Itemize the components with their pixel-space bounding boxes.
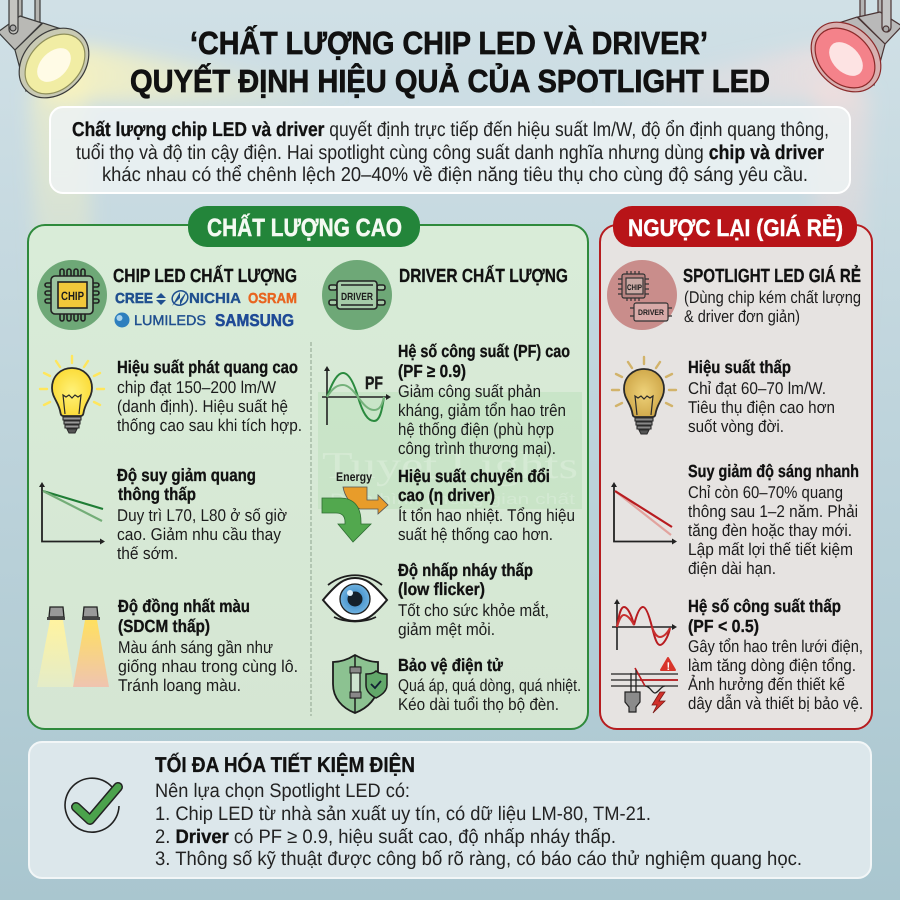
text: hệ số công suất thấp: Gây tổn hao trên lưới điện, xyxy=(688,637,863,656)
icon: driver xyxy=(322,260,392,330)
text: độ đồng nhất màu: Tránh loang màu. xyxy=(118,676,241,695)
text: hệ số công suất thấp: Hệ số công suất thấp xyxy=(688,596,841,616)
icon: low lumen decay chart xyxy=(39,482,105,544)
text: hiệu suất chuyển đổi xyxy=(398,466,575,544)
text: suy giảm độ sáng nhanh: Suy giảm độ sáng nhanh xyxy=(688,461,859,481)
text: hiệu suất phát quang cao: thống cao sau khi tích hợp. xyxy=(117,416,302,435)
text: hệ số công suất cao: hệ thống điện (phù hợp xyxy=(398,420,554,439)
text: độ đồng nhất màu: Màu ánh sáng gần như xyxy=(118,638,273,657)
text: độ nhấp nháy thấp: Tốt cho sức khỏe mắt, xyxy=(398,601,549,620)
icon: uniform colour beams xyxy=(37,607,109,687)
icon: power factor wave: PF xyxy=(365,373,383,393)
icon: driver: DRIVER xyxy=(341,291,373,303)
icon: low power factor wave and grid xyxy=(611,599,678,713)
title xyxy=(130,25,770,99)
text: recommendations xyxy=(155,752,802,870)
heading: chip LED: CHIP LED CHẤT LƯỢNG xyxy=(113,264,297,287)
text: hiệu suất phát quang cao: (danh định). Hiệu suất hệ xyxy=(117,397,288,416)
text: suy giảm độ sáng nhanh: Chỉ còn 60–70% quang xyxy=(688,483,843,502)
text: độ đồng nhất màu: giống nhau trong cùng lô. xyxy=(118,657,298,676)
panel: chất lượng cao xyxy=(28,206,588,729)
text: độ nhấp nháy thấp: giảm mệt mỏi. xyxy=(398,620,495,639)
icon: cheap chip and driver: CHIP xyxy=(627,283,643,292)
text: hiệu suất chuyển đổi: cao (η driver) xyxy=(398,485,495,505)
text: recommendations: 1. Chip LED từ nhà sản xuất uy tín, có dữ liệu LM-80, TM-21. xyxy=(155,803,651,825)
text: hệ số công suất cao: công trình thương mại). xyxy=(398,439,556,458)
text: độ nhấp nháy thấp: (low flicker) xyxy=(398,579,485,599)
icon: energy arrows: Energy xyxy=(336,470,372,484)
brand logos: SAMSUNG xyxy=(215,311,294,330)
text: hiệu suất thấp: Chỉ đạt 60–70 lm/W. xyxy=(688,379,826,398)
text: hệ số công suất cao: (PF ≥ 0.9) xyxy=(398,361,466,381)
watermark: Tuyet Lights xyxy=(322,445,578,487)
text: hệ số công suất cao: Giảm công suất phản xyxy=(398,382,541,401)
text: suy giảm độ sáng nhanh: điện dài hạn. xyxy=(688,559,776,578)
icon: power factor wave xyxy=(322,366,391,425)
icon: chip: CHIP xyxy=(61,289,84,303)
watermark: Định hình không gian chất xyxy=(330,491,576,508)
brand logos: CREE xyxy=(115,291,153,307)
brand logos xyxy=(114,288,297,330)
text: bảo vệ điện tử: Kéo dài tuổi thọ bộ đèn. xyxy=(398,695,559,714)
text: hệ số công suất cao: kháng, giảm tổn hao trên xyxy=(398,401,566,420)
text: spotlight LED giá rẻ: SPOTLIGHT LED GIÁ RẺ xyxy=(683,264,861,287)
text: hệ số công suất thấp: dây dẫn và thiết bị bảo vệ. xyxy=(688,694,863,713)
text: độ đồng nhất màu xyxy=(118,596,298,695)
text: suy giảm độ sáng nhanh: thông sau 1–2 năm. Phải xyxy=(688,502,858,521)
text: hiệu suất chuyển đổi: Hiệu suất chuyển đổi xyxy=(398,466,550,486)
text: recommendations: 3. Thông số kỹ thuật được công bố rõ ràng, có báo cáo thử nghiệm quang học. xyxy=(155,848,802,870)
brand logos: OSRAM xyxy=(248,291,297,307)
text: độ suy giảm quang thông xyxy=(117,465,287,563)
icon: chip xyxy=(37,260,107,330)
text: suy giảm độ sáng nhanh: tăng đèn hoặc thay mới. xyxy=(688,521,852,540)
heading pill: chất lượng cao xyxy=(188,206,420,247)
icon: cheap chip and driver: DRIVER xyxy=(638,308,664,317)
icon: dim bulb xyxy=(612,357,676,434)
text: độ đồng nhất màu: Độ đồng nhất màu xyxy=(118,596,250,616)
watermark xyxy=(318,392,582,509)
panel: tối đa hóa tiết kiệm điện xyxy=(29,742,871,878)
text: độ nhấp nháy thấp: Độ nhấp nháy thấp xyxy=(398,560,533,580)
text: độ suy giảm quang thông: Độ suy giảm quang xyxy=(117,465,256,485)
icon: energy arrows xyxy=(322,470,388,542)
text: độ nhấp nháy thấp xyxy=(398,560,549,639)
text: spotlight LED giá rẻ: & driver đơn giản) xyxy=(684,307,800,326)
light beams xyxy=(30,45,870,420)
text: recommendations: TỐI ĐA HÓA TIẾT KIỆM ĐIỆN xyxy=(155,752,415,777)
text: hiệu suất thấp: Hiệu suất thấp xyxy=(688,357,791,377)
text: độ đồng nhất màu: (SDCM thấp) xyxy=(118,616,210,636)
text: độ suy giảm quang thông: Duy trì L70, L80 ở số giờ xyxy=(117,506,287,525)
title: ‘CHẤT LƯỢNG CHIP LED VÀ DRIVER’ xyxy=(190,25,708,61)
icon: bright bulb xyxy=(40,356,104,433)
text: độ suy giảm quang thông: cao. Giảm nhu cầu thay xyxy=(117,525,281,544)
text: hiệu suất phát quang cao: chip đạt 150–200 lm/W xyxy=(117,378,276,397)
text: hệ số công suất thấp: Ảnh hưởng đến thiết kế xyxy=(688,674,845,694)
text: spotlight LED giá rẻ: (Dùng chip kém chất lượng xyxy=(684,288,861,307)
text: suy giảm độ sáng nhanh xyxy=(688,461,859,578)
icon: left yellow spotlight xyxy=(0,0,103,112)
text: hiệu suất thấp xyxy=(688,357,835,436)
text: hệ số công suất cao: Hệ số công suất (PF) cao xyxy=(398,341,570,361)
icon: eye xyxy=(323,575,387,622)
text: hiệu suất chuyển đổi: suất hệ thống cao hơn. xyxy=(398,525,553,544)
text: recommendations: 2. Driver có PF ≥ 0.9, hiệu suất cao, độ nhấp nháy thấp. xyxy=(155,826,616,848)
text: suy giảm độ sáng nhanh: Lập mất lợi thế tiết kiệm xyxy=(688,540,853,559)
brand logos: LUMILEDS xyxy=(134,312,206,328)
heading pill: ngược lại: NGƯỢC LẠI (GIÁ RẺ) xyxy=(628,214,843,242)
panel: ngược lại (giá rẻ) xyxy=(600,206,872,729)
icon: fast decay chart xyxy=(611,482,677,544)
icon: right red spotlight xyxy=(797,0,900,106)
heading pill: ngược lại xyxy=(613,206,857,247)
brand logos: NICHIA xyxy=(189,291,242,307)
intro text box: Chất lượng chip LED và driver quyết định trực tiếp đến hiệu suất lm/W, độ ổn định quang thông, xyxy=(72,119,829,141)
icon: check mark xyxy=(65,778,119,832)
text: hiệu suất chuyển đổi: Ít tổn hao nhiệt. Tổng hiệu xyxy=(398,506,575,525)
text: hiệu suất thấp: suốt vòng đời. xyxy=(688,417,784,436)
text: spotlight LED giá rẻ xyxy=(683,264,861,326)
text: hệ số công suất thấp: làm tăng dòng điện tổng. xyxy=(688,656,856,675)
heading: driver: DRIVER CHẤT LƯỢNG xyxy=(399,264,568,287)
icon: low power factor wave and grid: ! xyxy=(666,661,670,673)
text: hệ số công suất thấp xyxy=(688,596,863,713)
intro text box xyxy=(50,107,850,193)
text: hiệu suất phát quang cao xyxy=(117,357,302,435)
text: hệ số công suất cao xyxy=(398,341,570,458)
heading pill: chất lượng cao: CHẤT LƯỢNG CAO xyxy=(207,213,402,242)
text: độ suy giảm quang thông: thông thấp xyxy=(118,484,196,504)
icon: cheap chip and driver xyxy=(607,260,677,330)
intro text box: tuổi thọ và độ tin cậy điện. Hai spotlight cùng công suất danh nghĩa nhưng dùng chip và driver xyxy=(76,142,824,164)
text: bảo vệ điện tử: Quá áp, quá dòng, quá nhiệt. xyxy=(398,676,581,695)
text: hệ số công suất thấp: (PF < 0.5) xyxy=(688,616,759,636)
icon: shield with fuse xyxy=(333,655,387,713)
title: QUYẾT ĐỊNH HIỆU QUẢ CỦA SPOTLIGHT LED xyxy=(130,63,770,99)
text: recommendations: Nên lựa chọn Spotlight LED có: xyxy=(155,780,410,802)
text: độ suy giảm quang thông: thế sớm. xyxy=(117,544,178,563)
text: hiệu suất phát quang cao: Hiệu suất phát quang cao xyxy=(117,357,298,377)
intro text box: khác nhau có thể chênh lệch 20–40% về điện năng tiêu thụ cho cùng độ sáng yêu cầu. xyxy=(102,164,808,186)
text: hiệu suất thấp: Tiêu thụ điện cao hơn xyxy=(688,398,835,417)
text: bảo vệ điện tử xyxy=(398,655,581,714)
text: bảo vệ điện tử: Bảo vệ điện tử xyxy=(398,655,503,675)
